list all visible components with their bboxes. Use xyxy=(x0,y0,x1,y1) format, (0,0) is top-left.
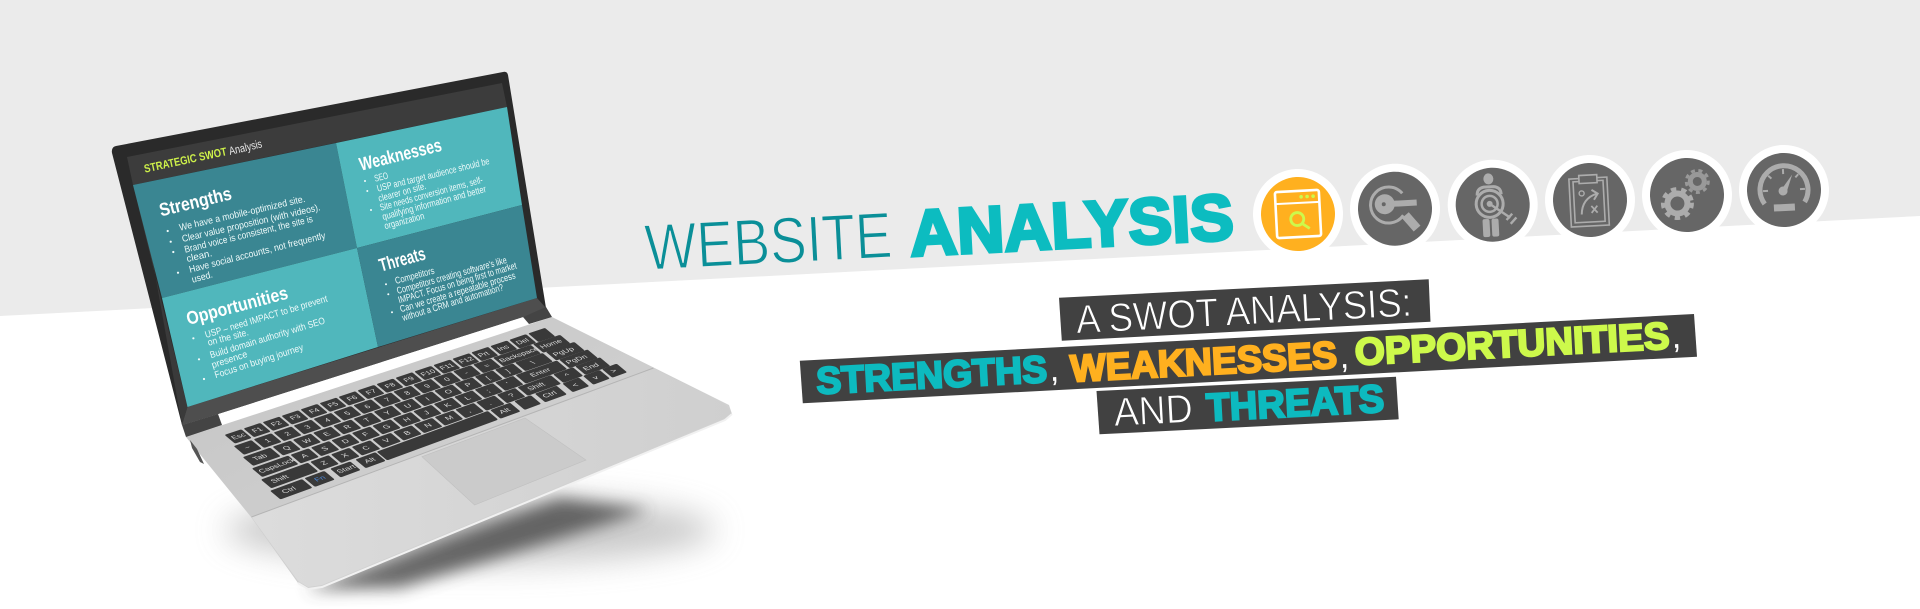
icon: keyword key and magnifier xyxy=(1348,161,1442,256)
function key row: F11 xyxy=(437,362,456,371)
shift key row: ? xyxy=(506,392,517,399)
function key row xyxy=(225,328,555,443)
touchpad xyxy=(422,418,586,505)
function key row: Ins xyxy=(495,343,512,352)
function key row: F8 xyxy=(382,381,398,390)
subtitle line 3 xyxy=(1096,377,1399,435)
number key row: Backspace xyxy=(497,346,541,364)
function key row: Del xyxy=(514,337,532,346)
threats text: without a CRM and automation? xyxy=(400,282,505,324)
bottom key row: Ctrl xyxy=(540,389,559,399)
QWERTY key row: O xyxy=(442,388,455,395)
icon: strategy clipboard xyxy=(1543,153,1637,247)
threats text: Can we create a repeatable process xyxy=(399,271,517,315)
subtitle line 1: A SWOT ANALYSIS: xyxy=(1075,281,1413,342)
strengths text: used. xyxy=(191,270,214,286)
strengths text: clean. xyxy=(185,248,213,265)
QWERTY key row: U xyxy=(402,402,414,409)
QWERTY key row: PgUp xyxy=(551,346,576,358)
shift key row: C xyxy=(360,444,372,451)
number key row: 5 xyxy=(342,410,353,417)
function key row: F5 xyxy=(325,400,341,409)
QWERTY key row: E xyxy=(321,430,333,438)
bottom key row: > xyxy=(608,367,620,374)
opportunities text xyxy=(184,282,329,381)
shift key row: End xyxy=(581,362,601,372)
hinges xyxy=(182,307,552,437)
strengths text: Have social accounts, not frequently xyxy=(188,230,327,276)
laptop base xyxy=(186,317,732,589)
number key row: 9 xyxy=(422,383,432,389)
screen: opportunities quadrant xyxy=(162,248,378,407)
home key row: K xyxy=(442,402,453,409)
function key row: F3 xyxy=(288,413,303,421)
home key row: L xyxy=(462,395,473,401)
QWERTY key row: \ xyxy=(528,359,538,365)
number key row: 8 xyxy=(402,390,412,396)
home key row: J xyxy=(421,409,432,416)
threats text: Threats xyxy=(376,243,428,276)
slide title: Analysis xyxy=(228,138,264,158)
QWERTY key row: Tab xyxy=(251,452,269,462)
threats text xyxy=(376,243,518,324)
strengths text: Brand voice is consistent, the site is xyxy=(183,214,314,256)
shift key row: Shift xyxy=(269,473,292,484)
subtitle line 2: STRENGTHS xyxy=(815,349,1048,403)
icon: target audience xyxy=(1445,157,1540,252)
function key row: F1 xyxy=(250,426,265,434)
number key row: 3 xyxy=(302,424,313,430)
bottom key row: < xyxy=(570,381,581,388)
title: website: WEBSITE xyxy=(643,198,894,284)
strengths text: Strengths xyxy=(157,183,234,220)
home key row: ; xyxy=(484,388,492,394)
opportunities text: USP – need IMPACT to be prevent xyxy=(204,294,329,341)
laptop illustration xyxy=(112,72,732,590)
subtitle xyxy=(800,279,1697,435)
QWERTY key row: P xyxy=(463,381,474,388)
icon: website search (active) xyxy=(1251,167,1345,261)
QWERTY key row: R xyxy=(341,423,354,430)
shift key row: Shift xyxy=(525,381,548,392)
number key row: 2 xyxy=(282,430,293,437)
bottom key row xyxy=(271,364,626,499)
home key row: PgDn xyxy=(564,353,589,366)
bottom key row: Alt xyxy=(362,456,378,465)
home key row: G xyxy=(380,423,393,430)
number key row: 4 xyxy=(322,417,333,423)
shift key row: . xyxy=(485,400,494,406)
number key row: - xyxy=(462,370,471,376)
QWERTY key row: Y xyxy=(382,409,393,416)
function key row: F2 xyxy=(269,419,284,428)
subtitle line 2: , xyxy=(1048,351,1060,389)
bottom key row: v xyxy=(590,374,601,381)
home key row: A xyxy=(299,452,311,459)
icon: speedometer xyxy=(1737,143,1831,237)
QWERTY key row xyxy=(244,342,584,465)
opportunities text: Focus on buying journey xyxy=(213,342,305,381)
shift key row: , xyxy=(465,408,473,414)
number key row: 6 xyxy=(362,403,373,410)
shift key row: ^ xyxy=(562,372,573,378)
home key row: ' xyxy=(504,381,513,387)
shift key row: B xyxy=(401,429,413,437)
strengths text: Clear value proposition (with videos). xyxy=(181,202,321,245)
number key row: ~ xyxy=(242,444,253,451)
threats text: Competitors xyxy=(394,266,436,287)
number key row: 7 xyxy=(382,396,393,403)
strengths text xyxy=(157,183,327,286)
screen: threats quadrant xyxy=(357,205,537,347)
home key row: F xyxy=(360,431,371,438)
function key row: F4 xyxy=(307,407,322,415)
screen: strengths quadrant xyxy=(133,143,357,298)
number key row: = xyxy=(481,362,493,369)
QWERTY key row: I xyxy=(423,396,432,402)
subtitle line 2: , xyxy=(1670,318,1682,356)
shift key row: N xyxy=(422,422,434,429)
strengths text: We have a mobile-optimized site. xyxy=(178,194,306,234)
bottom key row: Ctrl xyxy=(280,485,298,495)
screen: weaknesses quadrant xyxy=(336,107,522,248)
subtitle line 2: OPPORTUNITIES xyxy=(1354,316,1671,374)
slide title: STRATEGIC SWOT xyxy=(143,146,228,176)
home key row xyxy=(253,350,597,477)
icon: gears xyxy=(1640,148,1734,242)
opportunities text: Build domain authority with SEO xyxy=(209,316,326,361)
weaknesses text: USP and target audience should be xyxy=(376,156,491,195)
bottom key row: Fn xyxy=(312,474,328,483)
number key row: 0 xyxy=(442,376,452,383)
number key row: 1 xyxy=(262,437,273,444)
shift key row: V xyxy=(381,437,393,444)
QWERTY key row: [ xyxy=(484,375,493,381)
main title xyxy=(643,180,1235,284)
white strip under screen xyxy=(216,316,525,419)
home key row: D xyxy=(340,438,352,445)
weaknesses text: qualifying information and better xyxy=(381,184,488,223)
function key row: F9 xyxy=(401,375,416,383)
bottom key row: Alt xyxy=(497,406,513,415)
laptop lid xyxy=(112,72,546,425)
laptop shadow xyxy=(225,496,715,590)
shift key row xyxy=(262,358,610,488)
subtitle line 2: , xyxy=(1338,338,1350,376)
subtitle line 2 xyxy=(800,314,1697,403)
subtitle line 2: WEAKNESSES xyxy=(1069,335,1338,391)
grey slanted background xyxy=(0,0,1920,316)
function key row: F7 xyxy=(363,388,379,396)
icon row xyxy=(1251,143,1831,261)
subtitle line 3: AND xyxy=(1113,387,1194,435)
weaknesses text: clearer on site. xyxy=(377,181,428,205)
home key row: Enter xyxy=(528,366,553,378)
function key row: F12 xyxy=(456,355,476,365)
shift key row: M xyxy=(443,414,456,422)
weaknesses text: Site needs conversion items, self- xyxy=(379,175,484,214)
QWERTY key row: W xyxy=(300,437,315,445)
function key row: F10 xyxy=(418,368,438,378)
home key row: CapsLock xyxy=(256,457,298,474)
QWERTY key row: Q xyxy=(280,444,293,452)
title: analysis: ANALYSIS xyxy=(908,180,1235,270)
opportunities text: Opportunities xyxy=(184,282,290,329)
bottom key row: Start xyxy=(335,463,359,475)
weaknesses text xyxy=(357,134,491,232)
weaknesses text: Weaknesses xyxy=(357,134,444,175)
home key row: S xyxy=(319,445,331,452)
home key row: H xyxy=(401,416,413,423)
threats text: IMPACT. Focus on being first to market xyxy=(397,261,518,306)
threats text: Competitors creating software's like xyxy=(396,255,508,297)
function key row: Esc xyxy=(229,431,248,441)
opportunities text: presence xyxy=(210,349,249,371)
QWERTY key row: ] xyxy=(504,368,512,374)
weaknesses text: SEO xyxy=(373,171,389,185)
number key row xyxy=(234,335,570,454)
QWERTY key row: T xyxy=(361,416,373,423)
keyboard xyxy=(225,328,626,499)
shift key row: X xyxy=(339,452,351,459)
opportunities text: on the site. xyxy=(207,327,250,349)
number key row: Home xyxy=(538,338,564,350)
function key row: F6 xyxy=(344,394,360,402)
subtitle line 3: THREATS xyxy=(1205,378,1385,430)
function key row: Prt xyxy=(475,350,492,359)
weaknesses text: organization xyxy=(383,211,426,232)
shift key row: Z xyxy=(319,459,330,466)
